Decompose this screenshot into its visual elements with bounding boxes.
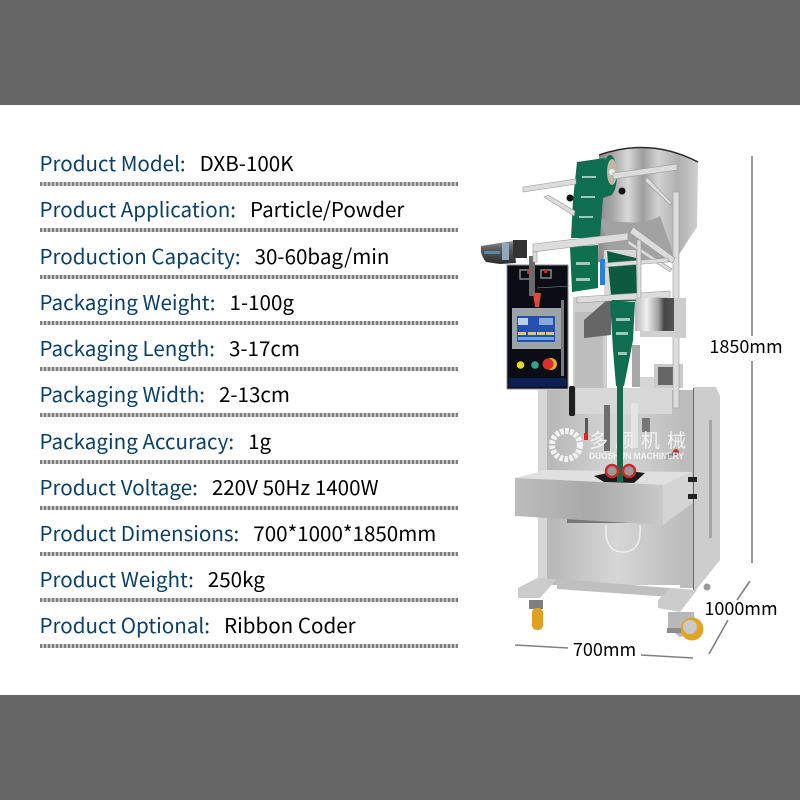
dosing cup [612,298,686,338]
tray [515,470,697,525]
buttons [517,358,557,370]
spec row: product optional: Product Optional: Ribbon Coder [40,609,356,639]
spec row: packaging width: Packaging Width: 2-13cm [40,378,290,408]
rear machine column [573,250,683,392]
base and casters [518,578,710,640]
spec row: packaging accuracy [40,425,458,464]
watermark [552,426,693,462]
bottom gray band [0,695,800,800]
dimension: width 700mm: 700mm [573,636,636,662]
spec row: product model [40,147,458,186]
spec row: product weight: Product Weight: 250kg [40,563,265,593]
hopper [598,147,698,262]
motor [481,240,527,264]
film strip upper [571,158,612,238]
sealing jaws and film tail [606,390,635,482]
film strip lower forming tube [610,300,635,386]
dimension: width 700mm [515,636,693,662]
watermark: DUOSHUN MACHINERY [589,451,685,462]
spec row: packaging length [40,332,458,371]
panel switches [520,256,551,307]
spec row: packaging weight [40,286,458,325]
watermark: 多顺机械 [589,426,693,453]
frame rails [523,164,679,408]
spec row: product voltage [40,471,458,510]
cabinet body [538,387,720,592]
spec row: product model: Product Model: DXB-100K [40,147,294,177]
control panel [507,256,568,389]
spec row: packaging length: Packaging Length: 3-17cm [40,332,300,362]
spec row: product voltage: Product Voltage: 220V 50Hz 1400W [40,471,379,501]
spec row: production capacity [40,240,458,279]
spec row: product dimensions: Product Dimensions: 700*1000*1850mm [40,517,436,547]
film strip behind [607,251,637,295]
spec row: packaging width [40,378,458,417]
packaging film path [570,155,637,486]
spec row: packaging accuracy: Packaging Accuracy: 1g [40,425,271,455]
spec row: product application: Product Application: Particle/Powder [40,193,404,223]
dimension: height 1850mm: 1850mm [709,333,783,359]
spec row: production capacity: Production Capacity: 30-60bag/min [40,240,390,270]
knobs [566,188,626,202]
top gray band [0,0,800,105]
film strip middle [570,245,598,292]
dimension: depth 1000mm [704,581,778,654]
spec row: product weight [40,563,458,602]
spec row: product optional [40,609,458,648]
spec row: product application [40,193,458,232]
spec row: packaging weight: Packaging Weight: 1-100g [40,286,294,316]
film markings [576,176,630,355]
dimension: depth 1000mm: 1000mm [704,595,778,621]
touch screen [512,308,561,349]
front mounting plate [569,386,679,460]
machine [481,147,720,640]
